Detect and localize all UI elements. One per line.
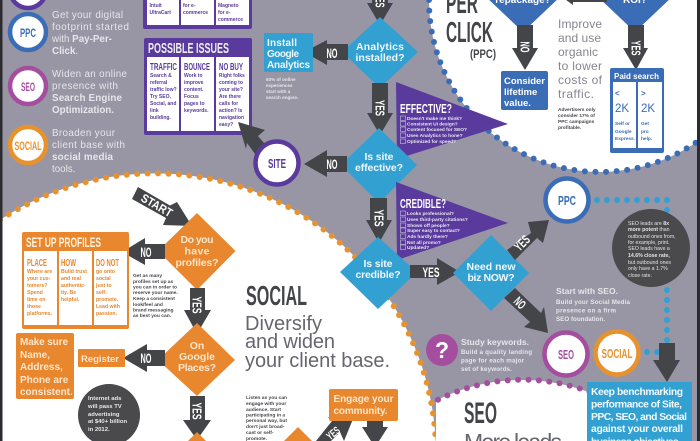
card: no buy: navigation bbox=[219, 115, 244, 121]
callout: internet ads stat bbox=[78, 384, 140, 441]
icon: question mark bbox=[426, 334, 458, 366]
text: tool cards bbox=[150, 3, 243, 23]
box: register: Register bbox=[81, 354, 119, 365]
card: bounce: content. bbox=[184, 87, 204, 93]
icon: social node ring: SOCIAL bbox=[602, 346, 633, 361]
icon: SEO ring bbox=[10, 68, 46, 104]
arrow: into analytics bbox=[367, 0, 393, 25]
box: make sure name address phone: Name, bbox=[20, 350, 50, 361]
checklist: credible items: Ads hardly there? bbox=[407, 234, 448, 240]
text: PPC intro: Get your digital bbox=[52, 10, 123, 21]
text: search engine stat: start with a bbox=[266, 89, 291, 94]
card: traffic: Social, and bbox=[150, 101, 176, 107]
diamond: is site effective: Is site bbox=[364, 151, 394, 163]
arrow: yes to engage bbox=[316, 417, 353, 441]
card: bounce: BOUNCE bbox=[184, 62, 210, 73]
icon: PPC ring: PPC bbox=[20, 26, 36, 40]
box: keep benchmarking: PPC, SEO, and Social bbox=[591, 412, 687, 423]
diamond: is site effective bbox=[341, 128, 417, 203]
card: no buy: Right folks bbox=[219, 73, 245, 79]
checklist: credible items: Shows off people? bbox=[407, 223, 450, 229]
arrow: no to site bbox=[304, 150, 347, 177]
box: make sure name address phone: Make sure bbox=[20, 337, 68, 348]
text: improve and use organic: and use bbox=[558, 31, 601, 45]
card: under 2K bbox=[615, 89, 635, 142]
text: search engine stat: search engine. bbox=[266, 95, 298, 100]
panel: possible issues bbox=[144, 38, 252, 135]
card: bounce bbox=[184, 62, 210, 114]
text: listen as you can: cast or self- bbox=[246, 430, 274, 436]
diamond: on google places: Google bbox=[179, 351, 215, 363]
text: study keywords: set of keywords. bbox=[461, 366, 512, 373]
text: start with SEO: presence on a firm bbox=[556, 308, 616, 314]
callout: seo leads stat: 14.6% close rate, bbox=[628, 253, 670, 259]
card: do not: passion. bbox=[96, 311, 118, 317]
card: traffic bbox=[150, 62, 177, 121]
diamond: do you have profiles: profiles? bbox=[176, 257, 218, 269]
text: advertisers stat: consider 17% of bbox=[558, 113, 595, 119]
diamond: is site credible: Is site bbox=[364, 258, 393, 270]
panel: paid search: Paid search bbox=[614, 72, 659, 81]
card: place: time on bbox=[27, 297, 45, 303]
arrow: down to benchmark bbox=[653, 343, 680, 382]
checklist: effective items: Consistent UI design? bbox=[407, 122, 458, 128]
ring: top purple bbox=[10, 0, 46, 8]
card: traffic: traffic low? bbox=[150, 87, 177, 93]
diamond: is site credible: credible? bbox=[356, 269, 400, 281]
card: bounce: pages to bbox=[184, 101, 205, 107]
diamond: analytics installed: installed? bbox=[356, 52, 404, 64]
card: under 2K: 2K bbox=[615, 103, 629, 115]
right page edge bbox=[697, 0, 700, 441]
icon: PPC node ring: PPC bbox=[558, 193, 576, 208]
arrow: no to google analytics: NO bbox=[326, 45, 338, 61]
dotted line: PPC to benchmark bbox=[597, 200, 667, 342]
heading: per click bbox=[446, 0, 496, 61]
card: place: your cus- bbox=[27, 276, 51, 282]
arrow: yes to google places bbox=[184, 288, 211, 334]
checklist: credible items bbox=[400, 211, 468, 251]
callout: seo leads stat: SEO leads are 8x bbox=[628, 221, 669, 227]
arrow: no to google analytics bbox=[304, 40, 348, 65]
box: install google analytics: Install bbox=[267, 38, 297, 49]
card: do not: go onto bbox=[96, 269, 115, 275]
box: keep benchmarking: performance of Site, bbox=[591, 400, 682, 410]
panel: pay per click circle bbox=[429, 0, 700, 172]
dotted line: social to benchmark bbox=[647, 349, 660, 355]
text: tool cards: commerce bbox=[218, 17, 243, 23]
arrow: yes to need new biz: YES bbox=[422, 264, 440, 280]
callout: seo leads stat bbox=[612, 209, 690, 287]
box: consider lifetime value: lifetime bbox=[504, 87, 537, 98]
arrow: no to register: NO bbox=[140, 350, 152, 366]
text: diversify and widen: your client base. bbox=[245, 350, 390, 372]
card: traffic: building. bbox=[150, 115, 171, 121]
box: consider lifetime value bbox=[501, 71, 548, 110]
text: improve and use organic: to lower bbox=[558, 59, 602, 73]
text: listen as you can: Listen as you can bbox=[246, 395, 287, 401]
card: do not: DO NOT bbox=[96, 258, 119, 269]
card: how bbox=[61, 258, 87, 303]
arrow: no to lifetime value bbox=[512, 25, 538, 70]
callout: internet ads stat: in 2012. bbox=[88, 427, 110, 433]
diamond: is site credible bbox=[340, 237, 417, 309]
text: improve and use organic: organic bbox=[558, 45, 598, 59]
card: no buy: easy? bbox=[219, 122, 233, 128]
callout: seo leads stat: SEO leads have a bbox=[628, 246, 670, 252]
icon: PPC node ring bbox=[546, 178, 588, 222]
diamond: analytics installed bbox=[342, 17, 418, 88]
diamond: repackage bbox=[485, 0, 561, 32]
text: PPC intro: Click. bbox=[52, 46, 78, 57]
text: diversify and widen: Diversify bbox=[245, 313, 322, 335]
box: make sure name address phone: Phone are bbox=[20, 375, 69, 386]
card: do not bbox=[95, 258, 120, 317]
arrow: ROI to repackage bbox=[562, 0, 607, 5]
callout: internet ads stat: advertising bbox=[88, 412, 120, 418]
heading: per click: (PPC) bbox=[470, 47, 496, 61]
text: listen as you can: personal way, but bbox=[246, 418, 287, 424]
box: make sure name address phone: consistent. bbox=[20, 387, 73, 398]
text: improve and use organic: Improve bbox=[558, 17, 602, 31]
box: install google analytics: Google bbox=[267, 49, 299, 60]
card: place: Spend bbox=[27, 290, 43, 296]
card: under 2K: < bbox=[615, 89, 620, 98]
arrow: yes to effective bbox=[367, 83, 393, 135]
diamond: bottom left bbox=[188, 432, 206, 441]
text: SEO intro: Widen an online bbox=[52, 69, 128, 80]
diamond: do you have profiles: Do you bbox=[180, 234, 214, 246]
card: over 2K: > bbox=[641, 89, 646, 98]
panel: credible checklist: CREDIBLE? bbox=[400, 196, 446, 211]
card: traffic: Search & bbox=[150, 73, 172, 79]
panel: set up profiles bbox=[22, 232, 129, 329]
box: keep benchmarking: Keep benchmarking bbox=[591, 387, 683, 398]
callout: internet ads stat: at $40+ billion bbox=[88, 419, 128, 425]
callout: seo leads stat: close rate. bbox=[628, 273, 652, 279]
checklist: effective items: Doesn't make me think? bbox=[407, 116, 462, 122]
checklist: effective items: Content focused for SEO? bbox=[407, 127, 467, 133]
arrow: down from engage bbox=[362, 421, 388, 441]
text: SEO intro: presence with bbox=[52, 81, 118, 92]
diamond: on google places bbox=[158, 323, 235, 396]
card: no buy: coming to bbox=[219, 80, 243, 86]
icon: social ring bbox=[10, 127, 46, 163]
callout: seo leads stat: only have a 1.7% bbox=[628, 266, 668, 272]
arrow: no to SEO: NO bbox=[511, 294, 529, 312]
box: engage your community bbox=[329, 389, 398, 421]
card: traffic: TRAFFIC bbox=[150, 62, 177, 73]
card: no buy: Are there bbox=[219, 94, 241, 100]
text: get as many profiles: you can in order to bbox=[133, 284, 177, 290]
arrow: yes to paid search: YES bbox=[628, 40, 644, 56]
callout: internet ads stat: will pass TV bbox=[87, 404, 122, 410]
text: SEO intro bbox=[52, 69, 128, 116]
card: how: authentic- bbox=[61, 283, 86, 289]
card: bounce: Work to bbox=[184, 73, 203, 79]
arrow: yes to PPC: YES bbox=[511, 232, 533, 254]
card: do not: self- bbox=[96, 290, 107, 296]
text: tool cards: commerce bbox=[183, 10, 208, 16]
heading: per click: CLICK bbox=[446, 17, 493, 49]
diamond: need new biz now: biz NOW? bbox=[468, 272, 514, 284]
text: study keywords: Study keywords. bbox=[461, 337, 529, 347]
text: advertisers stat: profitable. bbox=[558, 125, 581, 131]
text: tool cards: for e- bbox=[218, 10, 231, 16]
text: social intro: tools. bbox=[52, 164, 75, 175]
text: listen as you can: participating in a bbox=[246, 412, 285, 418]
arrow: yes down: YES bbox=[190, 402, 204, 420]
text: listen as you can bbox=[246, 395, 287, 441]
card: do not: just to bbox=[95, 283, 112, 289]
text: PPC intro: with Pay-Per- bbox=[51, 34, 112, 45]
checklist: effective items: Uses Analytics to hone? bbox=[407, 133, 463, 139]
text: advertisers stat: PPC campaigns bbox=[558, 119, 595, 125]
text: listen as you can: audience. Start bbox=[246, 407, 281, 413]
text: improve and use organic: costs of bbox=[558, 73, 603, 87]
text: social intro: Broaden your bbox=[52, 128, 116, 139]
heading: seo: SEO bbox=[464, 397, 497, 430]
card: place: those bbox=[27, 304, 41, 310]
card: traffic: referral bbox=[150, 80, 168, 86]
panel: possible issues: POSSIBLE ISSUES bbox=[148, 41, 229, 57]
card: place: platforms. bbox=[27, 311, 53, 317]
diamond: on google places: Places? bbox=[178, 362, 216, 374]
arrow: yes to paid search bbox=[623, 25, 648, 70]
card: how: HOW bbox=[61, 258, 76, 269]
card: over 2K: pro bbox=[641, 129, 649, 135]
text: study keywords bbox=[461, 337, 532, 373]
card: over 2K: 2K bbox=[641, 103, 655, 115]
text: tool cards: UltraCart bbox=[150, 10, 171, 16]
card: bounce: keywords. bbox=[184, 108, 209, 114]
diamond: do you have profiles bbox=[158, 213, 236, 290]
text: listen as you can: don't just broad- bbox=[246, 424, 285, 430]
arrow: yes to need new biz bbox=[410, 258, 460, 285]
diamond: on google places: On bbox=[190, 340, 204, 352]
icon: PPC ring bbox=[10, 14, 46, 50]
card: no buy: action? Is bbox=[219, 108, 243, 114]
icon: question mark: ? bbox=[435, 337, 449, 363]
heading: social: SOCIAL bbox=[246, 280, 307, 311]
diamond: ROI bbox=[597, 0, 673, 32]
text: study keywords: page for each major bbox=[461, 358, 525, 364]
box: keep benchmarking: against your overall bbox=[591, 424, 683, 435]
arrow: yes down bbox=[183, 396, 211, 440]
arrow: yes to credible: YES bbox=[372, 210, 386, 227]
box: make sure name address phone: Address, bbox=[20, 362, 63, 373]
diamond: do you have profiles: have bbox=[184, 246, 210, 258]
text: get as many profiles: reserve your name. bbox=[133, 290, 178, 296]
box: install google analytics: Analytics bbox=[267, 60, 310, 71]
text: get as many profiles: Get as many bbox=[133, 273, 162, 279]
arrow: no to set up profiles bbox=[122, 238, 165, 265]
card: over 2K: help. bbox=[641, 136, 652, 142]
text: search engine stat bbox=[266, 77, 298, 100]
card: under 2K: Self or bbox=[615, 121, 630, 127]
checklist: credible items: Updated? bbox=[407, 245, 429, 251]
text: improve and use organic bbox=[558, 17, 603, 101]
icon: SEO ring: SEO bbox=[21, 80, 35, 94]
callout: internet ads stat: Internet ads bbox=[88, 396, 122, 402]
text: advertisers stat bbox=[558, 107, 596, 131]
diamond: bottom right bbox=[284, 427, 312, 441]
box: engage your community: Engage your bbox=[334, 394, 394, 405]
text: PPC intro bbox=[51, 10, 129, 57]
text: advertisers stat: Advertisers only bbox=[558, 107, 596, 113]
text: get as many profiles: as best you can. bbox=[133, 313, 172, 319]
panel: tools top bbox=[143, 0, 252, 29]
checklist: effective items bbox=[400, 116, 467, 145]
arrow: no to register bbox=[123, 344, 165, 372]
checklist: credible items: Super easy to contact? bbox=[407, 228, 460, 234]
icon: SEO node ring bbox=[544, 332, 588, 376]
callout: seo leads stat: outbound ones from, bbox=[628, 234, 676, 240]
card: traffic: link bbox=[150, 108, 159, 114]
box: keep benchmarking bbox=[587, 382, 692, 441]
box: consider lifetime value: Consider bbox=[504, 76, 545, 87]
arrow: start bbox=[132, 187, 192, 226]
text: diversify and widen bbox=[245, 313, 390, 372]
card: do not: social bbox=[96, 276, 111, 282]
diamond: need new biz now: Need new bbox=[466, 261, 516, 273]
card: how: Build trust bbox=[61, 269, 87, 275]
panel: credible checklist bbox=[396, 182, 508, 260]
icon: site ring: SITE bbox=[268, 156, 286, 171]
card: place bbox=[27, 258, 53, 317]
arrow: no to lifetime value: NO bbox=[518, 41, 532, 53]
text: search engine stat: 93% of online bbox=[266, 77, 296, 82]
icon: site ring bbox=[256, 142, 298, 184]
arrow: site to issues bbox=[238, 122, 270, 158]
text: social intro bbox=[52, 128, 125, 175]
card: over 2K: Get bbox=[641, 121, 649, 127]
box: register bbox=[78, 349, 125, 367]
card: no buy: NO BUY bbox=[219, 62, 243, 73]
card: under 2K: Express. bbox=[615, 136, 635, 142]
text: study keywords: Build a quality landing bbox=[461, 349, 532, 356]
card: bounce: Focus bbox=[184, 94, 199, 100]
box: consider lifetime value: value. bbox=[504, 98, 531, 109]
card: place: tomers? bbox=[27, 283, 47, 289]
text: search engine stat: experiences bbox=[266, 83, 293, 88]
arrow: yes to effective: YES bbox=[372, 100, 388, 116]
text: tool cards: Magneto bbox=[218, 3, 239, 9]
text: start with SEO bbox=[556, 286, 631, 323]
card: no buy: calls for bbox=[219, 101, 238, 107]
card: how: and real bbox=[61, 276, 81, 282]
checklist: effective items: Optimized for speed? bbox=[407, 139, 456, 145]
card: under 2K: Google bbox=[615, 129, 632, 135]
text: tool cards: Intuit bbox=[150, 3, 162, 9]
arrow: yes to google places: YES bbox=[190, 296, 204, 314]
text: get as many profiles bbox=[133, 273, 178, 319]
text: get as many profiles: profiles set up as bbox=[133, 279, 174, 285]
text: SEO intro: Optimization. bbox=[52, 105, 114, 116]
card: no buy bbox=[219, 62, 245, 128]
arrow: no to set up profiles: NO bbox=[140, 244, 152, 260]
panel: social circle bbox=[0, 173, 436, 441]
text: start with SEO: Build your Social Media bbox=[556, 299, 631, 306]
text: SEO intro: Search Engine bbox=[52, 93, 123, 104]
text: start with SEO: SEO foundation. bbox=[556, 316, 605, 323]
card: bounce: improve bbox=[184, 80, 204, 86]
panel: set up profiles: SET UP PROFILES bbox=[26, 234, 101, 250]
arrow: no to site: NO bbox=[326, 156, 338, 172]
card: do not: promote. bbox=[96, 297, 119, 303]
text: get as many profiles: Keep a consistent bbox=[133, 296, 175, 302]
checklist: credible items: Not all promo? bbox=[407, 240, 441, 246]
card: place: PLACE bbox=[27, 258, 47, 269]
text: diversify and widen: and widen bbox=[245, 331, 335, 353]
diamond: is site effective: effective? bbox=[355, 162, 403, 174]
card: no buy: your site? bbox=[219, 87, 243, 93]
callout: seo leads stat: more potent than bbox=[628, 227, 670, 233]
text: PPC intro: footprint started bbox=[52, 22, 129, 33]
text: social intro: client base with bbox=[52, 140, 125, 151]
left page edge bbox=[0, 0, 2, 441]
icon: social node ring bbox=[596, 332, 638, 374]
card: traffic: Try SEO, bbox=[150, 94, 171, 100]
panel: effective checklist bbox=[396, 82, 508, 159]
box: install google analytics bbox=[264, 33, 313, 72]
text: get as many profiles: brand messaging bbox=[133, 308, 174, 314]
box: engage your community: community. bbox=[334, 406, 388, 417]
arrow: yes to PPC bbox=[507, 220, 549, 260]
panel: seo circle bbox=[436, 380, 662, 441]
icon: SEO node ring: SEO bbox=[558, 347, 574, 362]
diamond: analytics installed: Analytics bbox=[356, 41, 404, 53]
text: get as many profiles: look/feel and bbox=[133, 302, 163, 308]
checklist: credible items: Uses third-party citations? bbox=[407, 217, 468, 223]
icon: social ring: SOCIAL bbox=[14, 139, 42, 153]
arrow: no to SEO bbox=[504, 288, 548, 333]
card: place: Where are bbox=[27, 269, 52, 275]
card: how: ity. Be bbox=[61, 290, 76, 296]
card: how: helpful. bbox=[61, 297, 80, 303]
panel: paid search bbox=[610, 68, 664, 153]
callout: seo leads stat: for example, print. bbox=[628, 240, 670, 246]
diamond: need new biz now bbox=[453, 235, 529, 311]
text: tool cards: for e- bbox=[183, 3, 196, 9]
text: social intro: social media bbox=[52, 152, 114, 163]
arrow: yes to credible bbox=[366, 198, 392, 243]
card: over 2K bbox=[641, 89, 655, 142]
text: listen as you can: engage with your bbox=[246, 401, 286, 407]
arrow: start: START bbox=[139, 191, 175, 220]
card: do not: Lead with bbox=[96, 304, 120, 310]
panel: effective checklist: EFFECTIVE? bbox=[400, 101, 452, 116]
checklist: credible items: Looks professional? bbox=[407, 211, 454, 217]
box: make sure name address phone bbox=[16, 333, 74, 399]
callout: seo leads stat: but outbound ones bbox=[628, 260, 671, 266]
text: improve and use organic: traffic. bbox=[558, 87, 594, 101]
text: start with SEO: Start with SEO. bbox=[556, 286, 618, 296]
